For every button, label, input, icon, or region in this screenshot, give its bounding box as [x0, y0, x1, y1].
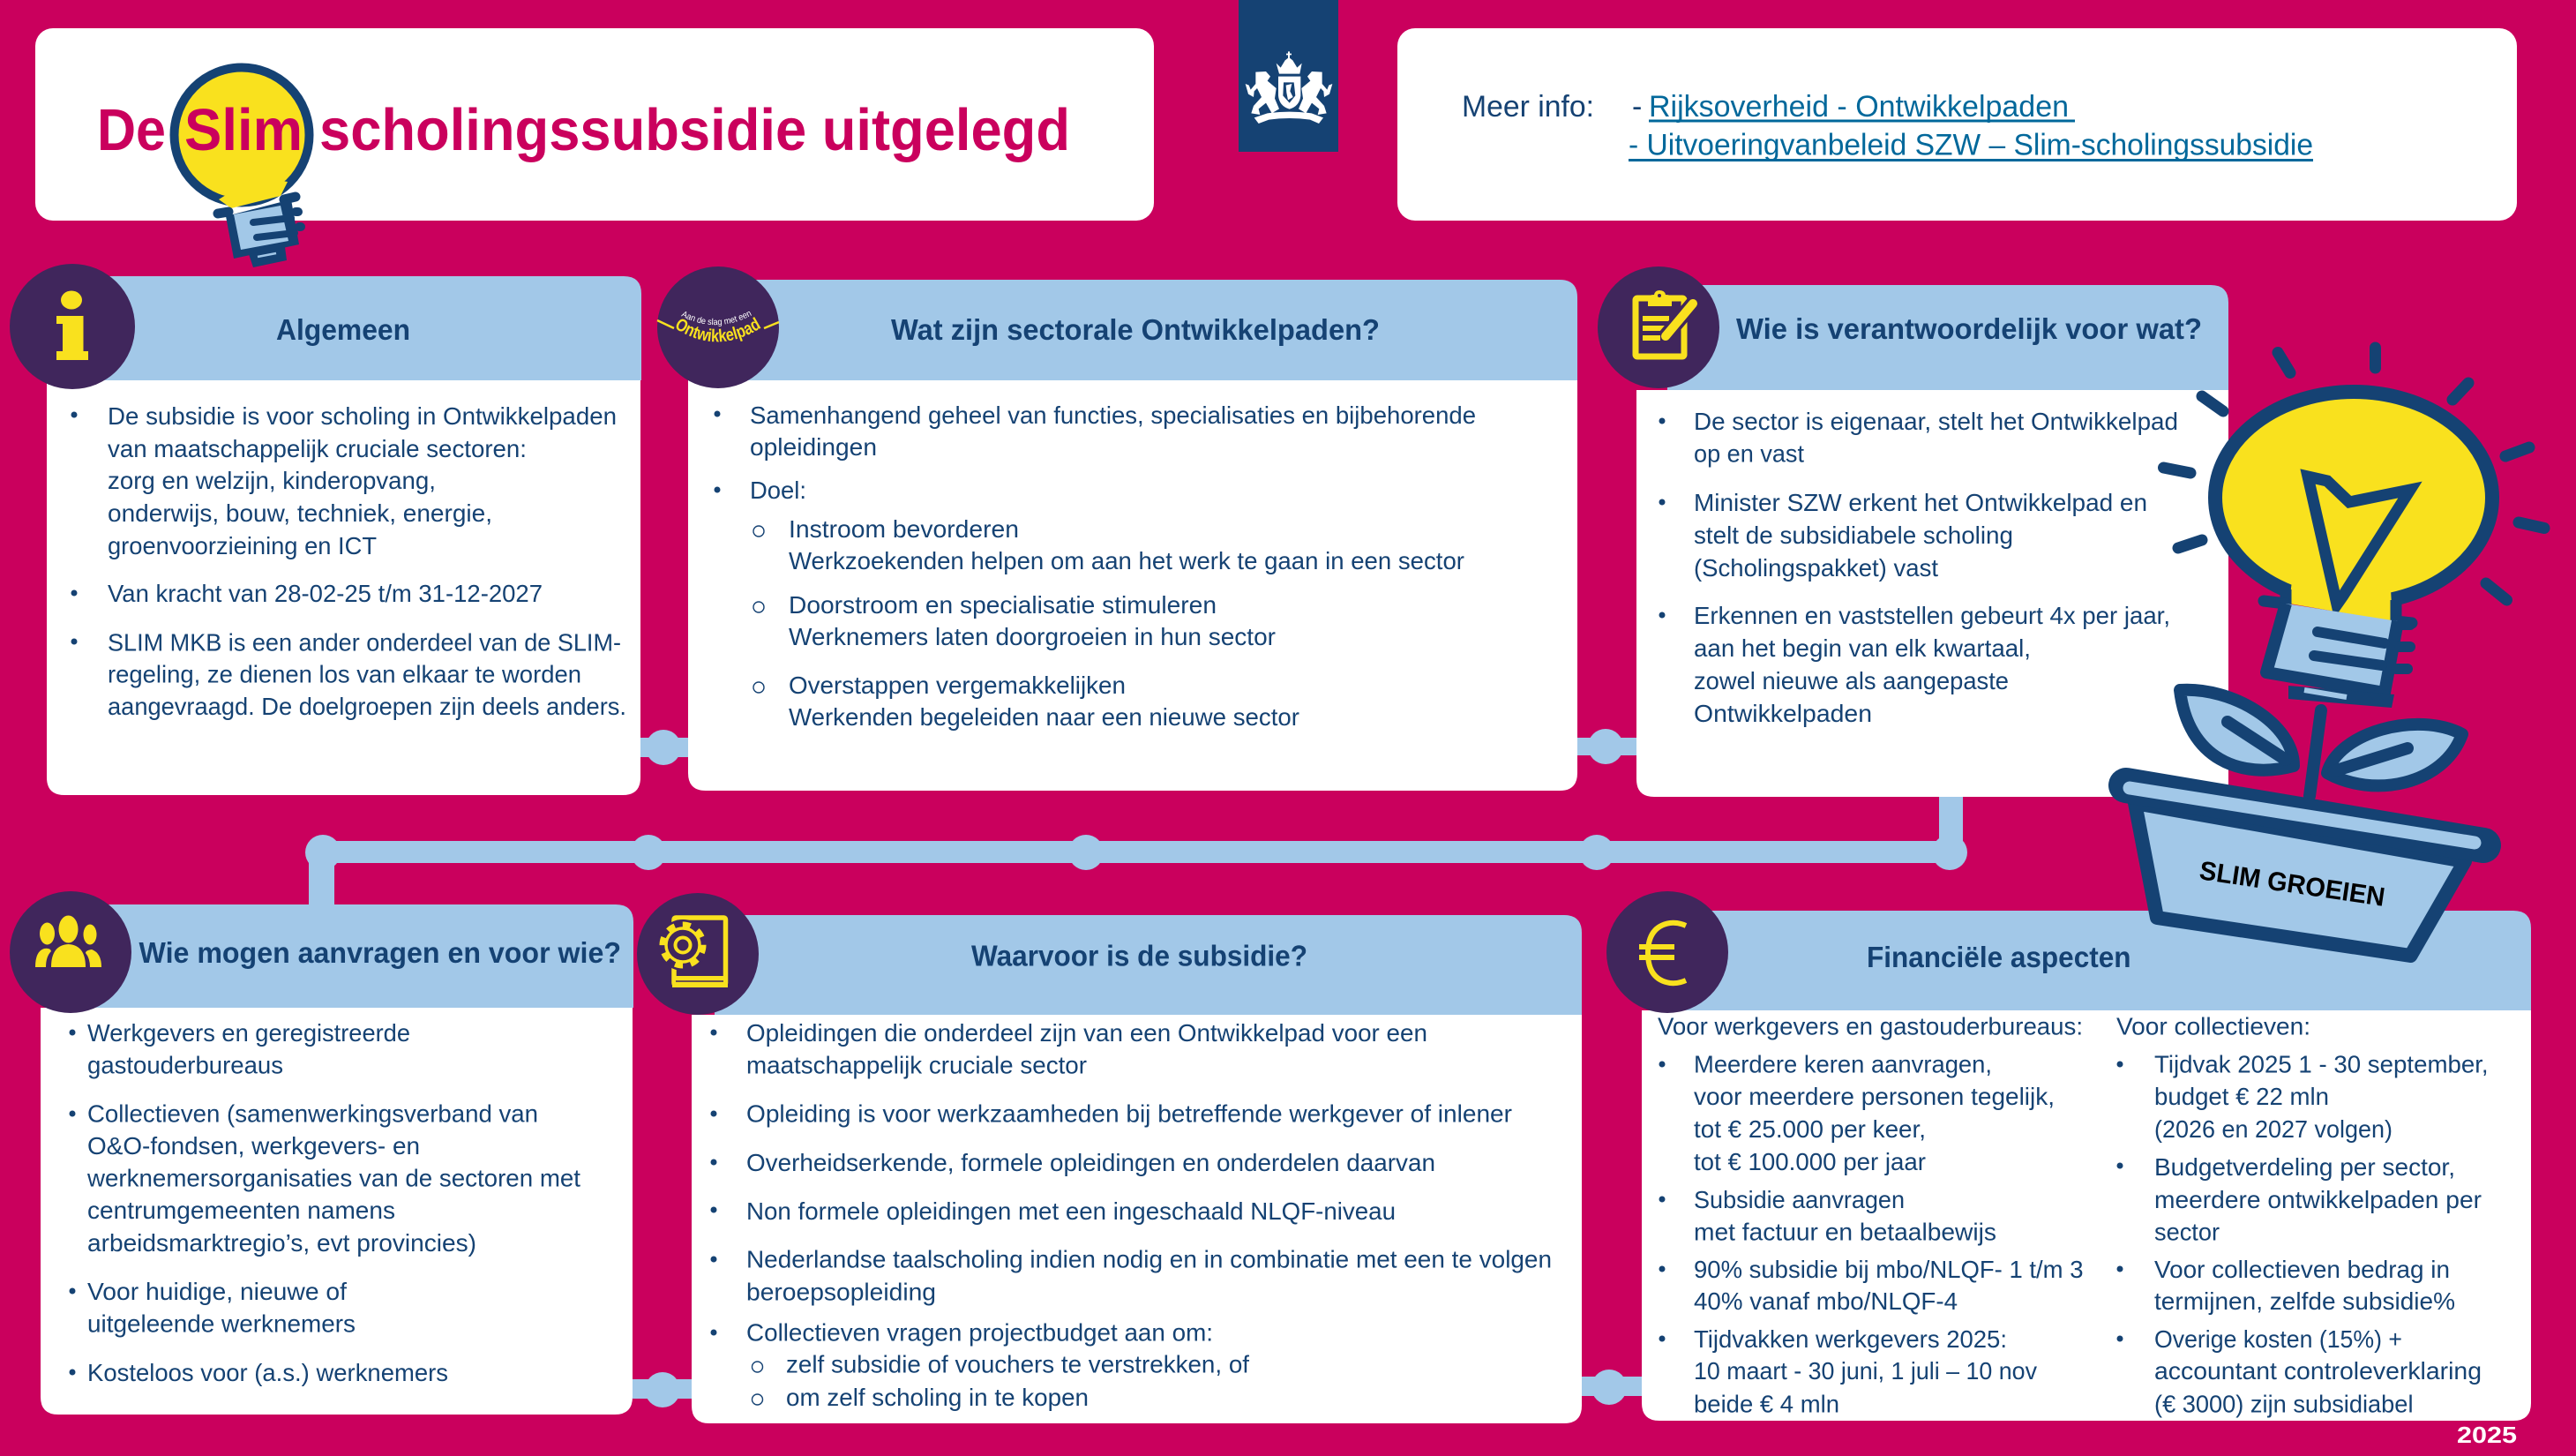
- panel: Wat zijn sectorale Ontwikkelpaden: [656, 266, 1577, 791]
- title text: scholingssubsidie uitgelegd: [319, 97, 1070, 163]
- icon: info: [10, 264, 135, 389]
- panel: Wie is verantwoordelijk voor wat: [1598, 266, 2228, 797]
- bullet list: De sector is eigenaar, stelt het Ontwikkelpad: [1694, 408, 2178, 435]
- link: Rijksoverheid: -: [1632, 90, 1642, 124]
- bullet list: groenvoorzieining en ICT: [108, 532, 377, 559]
- panel: Waarvoor is de subsidie: [637, 893, 1582, 1423]
- title text: Slim: [184, 97, 303, 163]
- bullet list: aangevraagd. De doelgroepen zijn deels anders.: [108, 693, 626, 720]
- bullet list: gastouderbureaus: [87, 1052, 283, 1078]
- bullet list: Overheidserkende, formele opleidingen en onderdelen daarvan: [746, 1149, 1435, 1176]
- bullet list: Collectieven (samenwerkingsverband van: [87, 1100, 538, 1128]
- icon: people: [10, 891, 131, 1013]
- column: collectieven: Budgetverdeling per sector,: [2154, 1153, 2455, 1181]
- bullet list: uitgeleende werknemers: [87, 1310, 356, 1338]
- icon: rays: [2163, 348, 2544, 600]
- column: werkgevers en gastouderbureaus: Tijdvakken werkgevers 2025:: [1694, 1325, 2007, 1353]
- heading: Wat zijn sectorale Ontwikkelpaden?: [891, 313, 1380, 346]
- column: werkgevers en gastouderbureaus: Meerdere keren aanvragen,: [1694, 1051, 1992, 1078]
- bullet list: Samenhangend geheel van functies, specialisaties en bijbehorende: [750, 402, 1476, 429]
- column: collectieven: Overige kosten (15%) +: [2154, 1325, 2402, 1353]
- bullet list: Erkennen en vaststellen gebeurt 4x per jaar,: [1694, 602, 2170, 629]
- link: Rijksoverheid: Rijksoverheid - Ontwikkelpaden: [1649, 90, 2069, 124]
- label: SLIM GROEIEN: SLIM GROEIEN: [2198, 856, 2387, 912]
- bullet list: Opleidingen die onderdeel zijn van een Ontwikkelpad voor een: [746, 1019, 1427, 1047]
- bullet list: Opleiding is voor werkzaamheden bij betreffende werkgever of inlener: [746, 1100, 1512, 1128]
- column: collectieven: (€ 3000) zijn subsidiabel: [2154, 1391, 2414, 1418]
- illustration: large light bulb growing from plant pot: [2126, 348, 2544, 956]
- bullet list: Ontwikkelpaden: [1694, 700, 1872, 727]
- bullet list: arbeidsmarktregio’s, evt provincies): [87, 1229, 476, 1257]
- bullet list: zorg en welzijn, kinderopvang,: [108, 467, 436, 494]
- logo: Rijksoverheid: [1239, 0, 1338, 152]
- column: collectieven: accountant controleverklaring: [2154, 1357, 2482, 1385]
- bullet list: Kosteloos voor (a.s.) werknemers: [87, 1359, 448, 1386]
- bullet list: (Scholingspakket) vast: [1694, 554, 1938, 582]
- column: collectieven: Tijdvak 2025 1 - 30 september,: [2154, 1051, 2489, 1078]
- bullet list: Werknemers laten doorgroeien in hun sector: [789, 623, 1276, 650]
- heading: Financiële aspecten: [1867, 941, 2131, 973]
- bullet list: zowel nieuwe als aangepaste: [1694, 667, 2009, 694]
- column: collectieven: [2116, 1013, 2489, 1418]
- icon: pot: [2126, 785, 2483, 956]
- connector lines between panels: [305, 729, 1967, 1407]
- column: werkgevers en gastouderbureaus: Subsidie aanvragen: [1694, 1186, 1905, 1213]
- icon: euro: [1606, 891, 1728, 1013]
- bullet list: op en vast: [1694, 439, 1804, 468]
- bullet list: Collectieven vragen projectbudget aan om:: [746, 1318, 1213, 1347]
- heading: Wie is verantwoordelijk voor wat?: [1736, 312, 2202, 345]
- column: collectieven: Voor collectieven:: [2116, 1013, 2310, 1040]
- bullet list: [715, 402, 1476, 731]
- column: collectieven: Voor collectieven bedrag in: [2154, 1256, 2450, 1283]
- bullet list: regeling, ze dienen los van elkaar te worden: [108, 660, 581, 688]
- bullet list: Doel:: [750, 477, 806, 504]
- icon: small light bulb: [175, 67, 309, 267]
- column: werkgevers en gastouderbureaus: beide € 4 mln: [1694, 1391, 1839, 1418]
- bullet list: zelf subsidie of vouchers te verstrekken, of: [786, 1350, 1249, 1378]
- bullet list: werknemersorganisaties van de sectoren met: [86, 1165, 580, 1191]
- bullet list: maatschappelijk cruciale sector: [746, 1052, 1087, 1078]
- heading: Waarvoor is de subsidie?: [971, 939, 1307, 972]
- icon: stem and leaves: [2180, 690, 2462, 796]
- icon: Ontwikkelpad logo: Aan de slag met een: [681, 311, 752, 326]
- heading: Wie mogen aanvragen en voor wie?: [139, 936, 621, 969]
- bullet list: Werkgevers en geregistreerde: [87, 1019, 410, 1047]
- link: Uitvoeringvanbeleid: - Uitvoeringvanbeleid SZW – Slim-scholingssubsidie: [1629, 129, 2313, 162]
- bullet list: [69, 1019, 580, 1386]
- bullet list: Werkzoekenden helpen om aan het werk te gaan in een sector: [789, 547, 1464, 574]
- column: werkgevers en gastouderbureaus: tot € 25.000 per keer,: [1694, 1115, 1926, 1143]
- title card: [35, 28, 1154, 267]
- bullet list: onderwijs, bouw, techniek, energie,: [108, 499, 492, 527]
- heading: Algemeen: [276, 313, 410, 346]
- bullet list: O&O-fondsen, werkgevers- en: [87, 1132, 420, 1160]
- bullet list: van maatschappelijk cruciale sectoren:: [108, 435, 527, 462]
- bullet list: opleidingen: [750, 433, 877, 461]
- label: meer info: Meer info:: [1462, 90, 1594, 124]
- column: werkgevers en gastouderbureaus: 90% subsidie bij mbo/NLQF- 1 t/m 3: [1694, 1256, 2084, 1283]
- bullet list: Doorstroom en specialisatie stimuleren: [789, 591, 1217, 619]
- bullet list: Overstappen vergemakkelijken: [789, 672, 1126, 699]
- column: werkgevers en gastouderbureaus: voor meerdere personen tegelijk,: [1694, 1083, 2055, 1110]
- column: collectieven: sector: [2154, 1219, 2220, 1246]
- bullet list: aan het begin van elk kwartaal,: [1694, 634, 2031, 662]
- column: werkgevers en gastouderbureaus: tot € 100.000 per jaar: [1694, 1148, 1926, 1175]
- bullet list: De subsidie is voor scholing in Ontwikkelpaden: [108, 402, 617, 430]
- column: werkgevers en gastouderbureaus: 10 maart - 30 juni, 1 juli – 10 nov: [1694, 1357, 2037, 1385]
- icon: book with gear: [637, 893, 759, 1015]
- column: collectieven: termijnen, zelfde subsidie%: [2154, 1287, 2455, 1315]
- icon: Ontwikkelpad logo: Ontwikkelpad: [676, 317, 760, 342]
- bullet list: om zelf scholing in te kopen: [786, 1384, 1089, 1411]
- bullet list: Non formele opleidingen met een ingeschaald NLQF-niveau: [746, 1197, 1396, 1225]
- panel: Wie mogen aanvragen en voor wie: [10, 891, 633, 1415]
- bullet list: Instroom bevorderen: [789, 515, 1019, 543]
- bullet list: Werkenden begeleiden naar een nieuwe sector: [789, 703, 1299, 731]
- column: werkgevers en gastouderbureaus: met factuur en betaalbewijs: [1694, 1219, 1996, 1246]
- bullet list: [711, 1019, 1552, 1411]
- column: werkgevers en gastouderbureaus: [1658, 1013, 2084, 1418]
- bullet list: SLIM MKB is een ander onderdeel van de SLIM-: [108, 628, 621, 657]
- column: werkgevers en gastouderbureaus: 40% vanaf mbo/NLQF-4: [1694, 1287, 1958, 1315]
- year label: 2025: [2457, 1422, 2517, 1448]
- column: collectieven: meerdere ontwikkelpaden per: [2154, 1186, 2482, 1213]
- bullet list: stelt de subsidiabele scholing: [1694, 522, 2013, 549]
- icon: Ontwikkelpad logo: [656, 266, 780, 388]
- panel: Algemeen: [10, 264, 641, 795]
- bullet list: centrumgemeenten namens: [87, 1197, 395, 1224]
- bullet list: Voor huidige, nieuwe of: [87, 1278, 347, 1305]
- bullet list: Minister SZW erkent het Ontwikkelpad en: [1694, 489, 2147, 516]
- column: collectieven: (2026 en 2027 volgen): [2154, 1115, 2393, 1143]
- bullet list: beroepsopleiding: [746, 1278, 936, 1306]
- title text: De: [97, 97, 166, 163]
- icon: clipboard: [1598, 266, 1719, 388]
- icon: coat of arms: [1246, 51, 1332, 124]
- info card: [1397, 28, 2517, 221]
- bullet list: [1659, 408, 2178, 727]
- bullet list: Van kracht van 28-02-25 t/m 31-12-2027: [108, 580, 543, 607]
- bullet list: Nederlandse taalscholing indien nodig en in combinatie met een te volgen: [746, 1246, 1552, 1272]
- icon: bulb: [2215, 392, 2492, 708]
- column: collectieven: budget € 22 mln: [2154, 1083, 2329, 1110]
- column: werkgevers en gastouderbureaus: Voor werkgevers en gastouderbureaus:: [1658, 1013, 2083, 1040]
- bullet list: [71, 402, 626, 720]
- panel: Financiele aspecten: [1606, 891, 2531, 1421]
